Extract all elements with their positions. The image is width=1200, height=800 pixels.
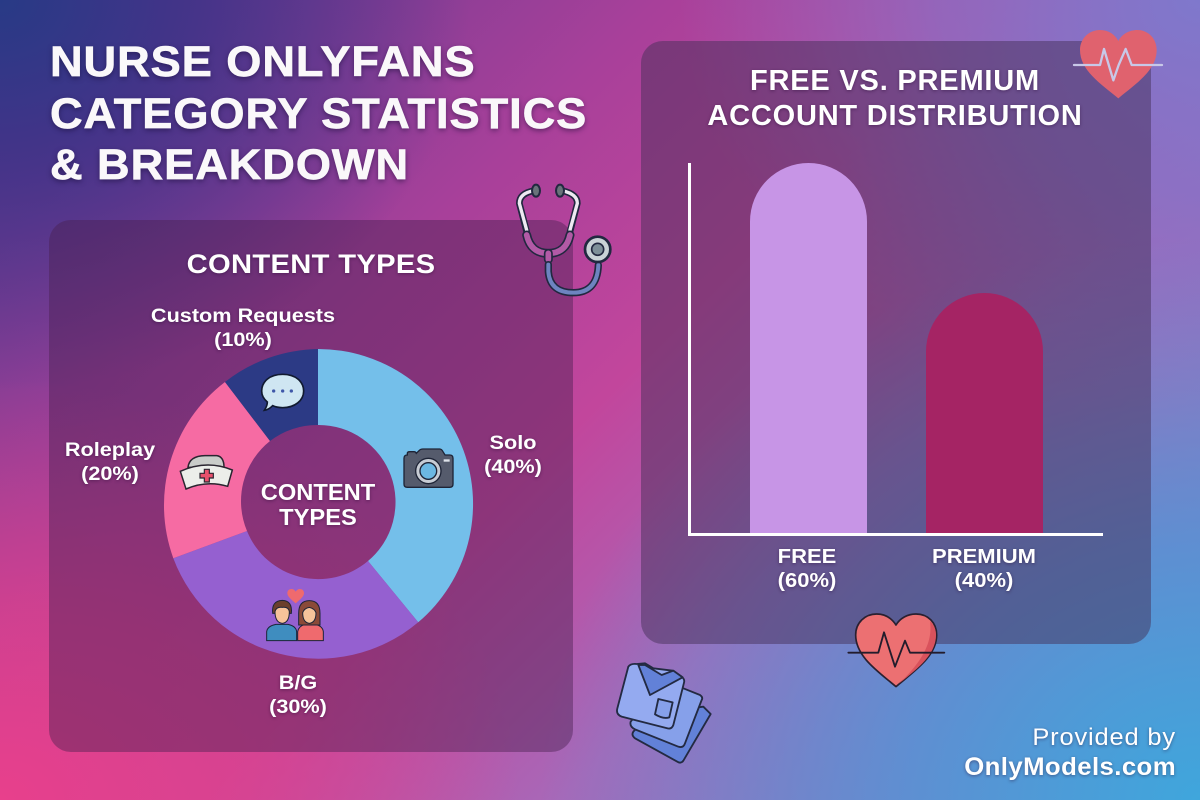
label: b/g: B/G xyxy=(279,673,317,694)
icon: heart with pulse bottom xyxy=(847,613,946,688)
donut centre label xyxy=(260,479,376,530)
label: custom requests: Custom Requests xyxy=(151,306,335,327)
label: solo xyxy=(484,433,542,479)
label: b/g xyxy=(268,673,328,719)
icon: camera xyxy=(403,448,454,488)
credit: onlymodels.com: OnlyModels.com xyxy=(964,753,1176,781)
title: & BREAKDOWN xyxy=(50,141,409,189)
donut centre label: TYPES xyxy=(279,504,357,530)
slice: roleplay 20% xyxy=(164,382,270,558)
bar: premium 40% xyxy=(926,293,1043,534)
chart axes xyxy=(690,163,1103,534)
credit: provided by: Provided by xyxy=(1032,724,1176,751)
slice: custom requests 10% xyxy=(225,349,318,441)
label: roleplay: Roleplay xyxy=(65,440,155,461)
label: solo: Solo xyxy=(490,433,536,454)
label: premium xyxy=(932,546,1036,593)
donut centre label: CONTENT xyxy=(261,479,375,505)
donut chart xyxy=(164,349,474,659)
icon: speech bubble xyxy=(260,374,304,412)
label: custom requests: (10%) xyxy=(214,330,272,351)
title: CATEGORY STATISTICS xyxy=(50,90,587,138)
title: NURSE ONLYFANS xyxy=(50,38,476,86)
panel heading: content types: CONTENT TYPES xyxy=(187,249,435,279)
icon: nurse cap xyxy=(180,454,234,490)
icon: stethoscope xyxy=(516,184,612,296)
panel: free vs premium xyxy=(641,41,1151,644)
panel: content types xyxy=(49,220,573,752)
panel heading: free vs premium: ACCOUNT DISTRIBUTION xyxy=(707,100,1083,132)
label: free xyxy=(778,546,836,593)
slice: solo 40% xyxy=(318,349,473,622)
bar chart xyxy=(688,163,1103,536)
label: roleplay: (20%) xyxy=(81,464,139,485)
label: custom requests xyxy=(151,306,335,352)
icon: heart with pulse top right xyxy=(1072,30,1164,98)
label: premium: (40%) xyxy=(955,570,1013,592)
icon: folded scrubs xyxy=(616,662,712,764)
panel heading: free vs premium: FREE VS. PREMIUM xyxy=(750,65,1040,97)
bar: free 60% xyxy=(750,163,867,534)
icon: couple xyxy=(266,589,324,642)
label: premium: PREMIUM xyxy=(932,546,1036,568)
title xyxy=(50,38,588,189)
label: free: (60%) xyxy=(778,570,836,592)
label: roleplay xyxy=(65,440,156,486)
panel heading: free vs premium xyxy=(707,65,1083,132)
label: solo: (40%) xyxy=(484,457,542,478)
label: b/g: (30%) xyxy=(269,697,327,718)
label: free: FREE xyxy=(778,546,836,568)
slice: b/g 30% xyxy=(173,531,418,659)
